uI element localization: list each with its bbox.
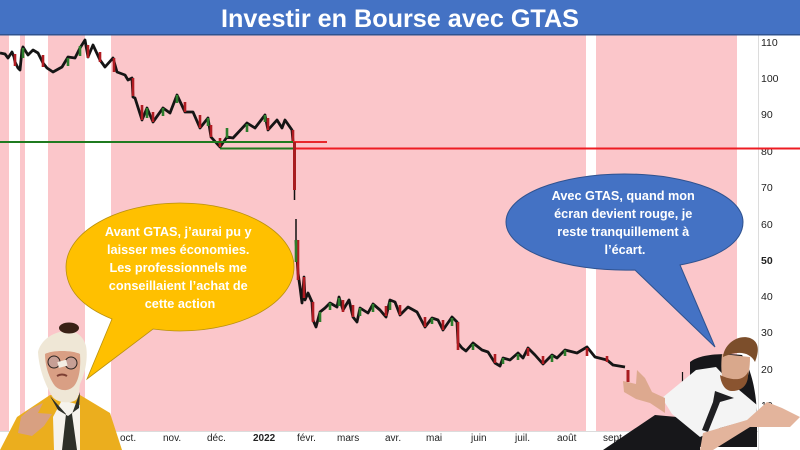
x axis labels: août — [557, 433, 577, 444]
figure: man in chair shrugging — [603, 337, 800, 450]
x axis labels: sept. — [603, 433, 625, 444]
tie — [702, 391, 734, 432]
x axis labels: juin — [470, 433, 487, 444]
bandage — [38, 331, 87, 402]
hair bun — [59, 322, 79, 334]
figure: bandaged man pointing — [0, 322, 122, 450]
x axis labels: nov. — [163, 433, 181, 444]
support line green — [0, 141, 293, 143]
last red candle — [626, 370, 630, 382]
y axis labels: 60 — [761, 219, 773, 231]
callout text: Les professionnels me — [109, 261, 247, 275]
callout text: conseillaient l’achat de — [109, 279, 248, 293]
resistance line long red — [295, 148, 800, 150]
y axis label 80: 80 — [761, 146, 773, 158]
shirt — [53, 400, 80, 450]
x axis labels: déc. — [207, 433, 226, 444]
y axis labels: 100 — [761, 73, 779, 85]
callout: avant GTAS — [66, 203, 294, 379]
x axis labels: oct. — [120, 433, 136, 444]
y axis labels — [761, 37, 779, 412]
hair — [723, 337, 758, 362]
x axis labels: juil. — [514, 433, 530, 444]
chair — [690, 354, 757, 447]
support line second green — [220, 148, 295, 150]
callout text: cette action — [145, 297, 215, 311]
title banner — [0, 0, 800, 36]
x axis labels — [120, 433, 625, 444]
title: Investir en Bourse avec GTAS — [221, 5, 579, 33]
resistance line short red — [293, 141, 327, 143]
price curve before the gap — [0, 40, 293, 147]
right hand and arm — [700, 402, 800, 450]
trousers — [603, 415, 700, 450]
sleeve — [12, 432, 38, 450]
lone wick — [682, 372, 684, 392]
callout text: reste tranquillement à — [557, 225, 690, 239]
y axis labels: 50 — [761, 255, 773, 267]
callout text: laisser mes économies. — [107, 243, 249, 257]
x axis labels: 2022 — [253, 433, 276, 444]
tie — [50, 392, 80, 450]
left hand and arm — [623, 370, 665, 413]
x axis labels: mars — [337, 433, 359, 444]
red candles after the gap — [298, 240, 607, 364]
green candles after the gap — [296, 240, 565, 364]
neck and face — [721, 354, 750, 391]
callout: avec GTAS — [506, 174, 743, 347]
y axis labels: 70 — [761, 182, 773, 194]
red candles before the gap — [15, 45, 293, 147]
face — [45, 351, 80, 390]
mouth — [57, 374, 67, 376]
shirt — [662, 367, 757, 437]
y axis labels: 110 — [761, 37, 778, 49]
y axis labels: 10 — [761, 400, 773, 412]
glasses — [48, 356, 77, 369]
hand pointing — [18, 403, 52, 436]
x axis labels: févr. — [297, 433, 316, 444]
x axis labels: avr. — [385, 433, 401, 444]
x axis labels: mai — [426, 433, 442, 444]
beard — [720, 372, 748, 391]
price curve after the gap — [296, 240, 625, 367]
green candles before the gap — [23, 46, 265, 138]
callout text: Avant GTAS, j’aurai pu y — [105, 225, 252, 239]
callout text: l’écart. — [605, 243, 645, 257]
jacket — [0, 395, 122, 450]
crash candle — [293, 142, 296, 190]
y axis labels: 40 — [761, 291, 773, 303]
callout text: Avec GTAS, quand mon — [552, 189, 695, 203]
y axis labels: 20 — [761, 364, 773, 376]
y axis labels: 30 — [761, 327, 773, 339]
nose bandage — [57, 360, 68, 368]
callout text: écran devient rouge, je — [554, 207, 692, 221]
y axis labels: 90 — [761, 109, 773, 121]
